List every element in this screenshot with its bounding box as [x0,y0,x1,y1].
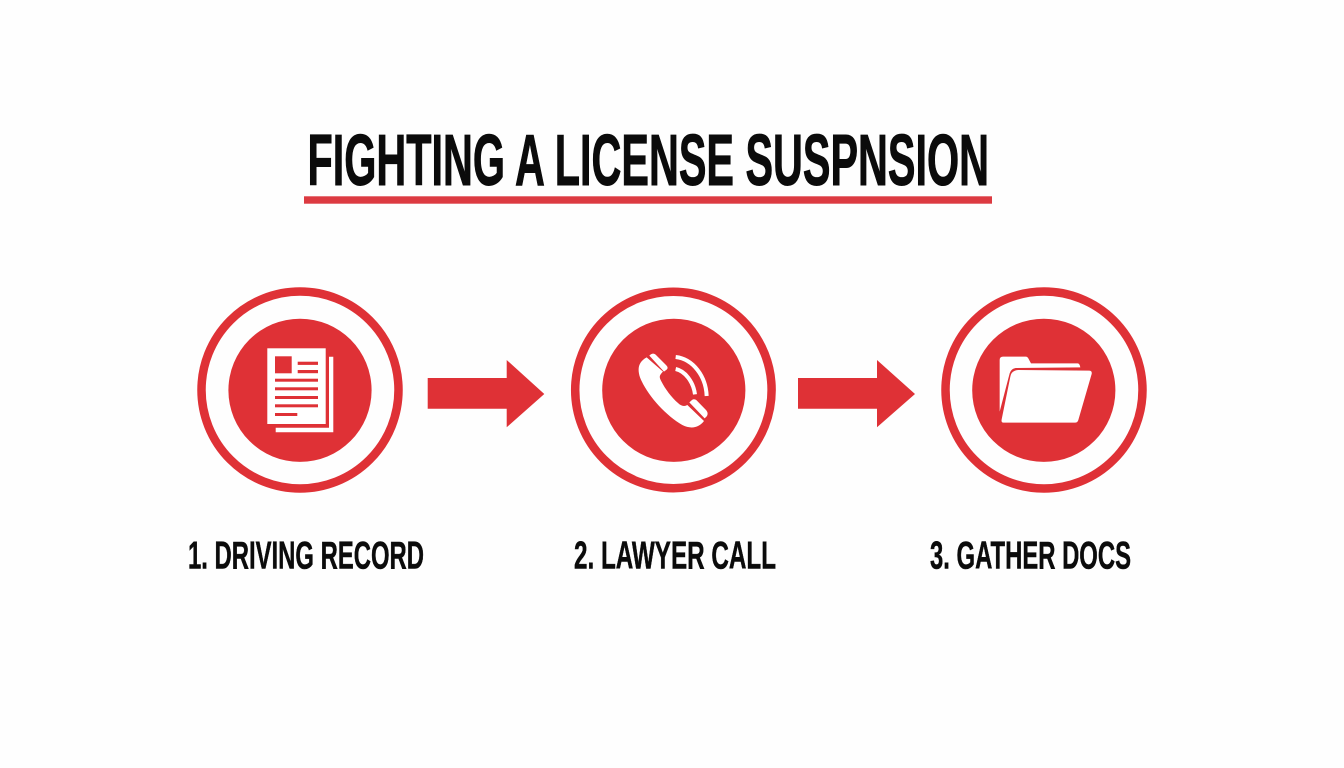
step 2: lawyer call [575,292,772,488]
step 3 red disc [972,319,1115,462]
title underline [304,196,992,204]
label: step 3: 3. GATHER DOCS [930,534,1131,577]
step 1 ring [202,292,398,488]
step 1: driving record [202,292,398,488]
step 3 ring [946,292,1142,488]
arrow 1 [428,360,544,427]
step 3: gather docs [946,292,1142,488]
icon: folder [1000,357,1092,423]
arrow 2 [798,360,915,427]
step 2 red disc [602,319,745,462]
label: step 2: 2. LAWYER CALL [574,534,776,577]
label: step 1: 1. DRIVING RECORD [188,534,424,577]
icon: phone [639,354,708,427]
icon: document [267,348,333,432]
step 2 ring [575,292,772,488]
step 1 red disc [228,319,372,462]
